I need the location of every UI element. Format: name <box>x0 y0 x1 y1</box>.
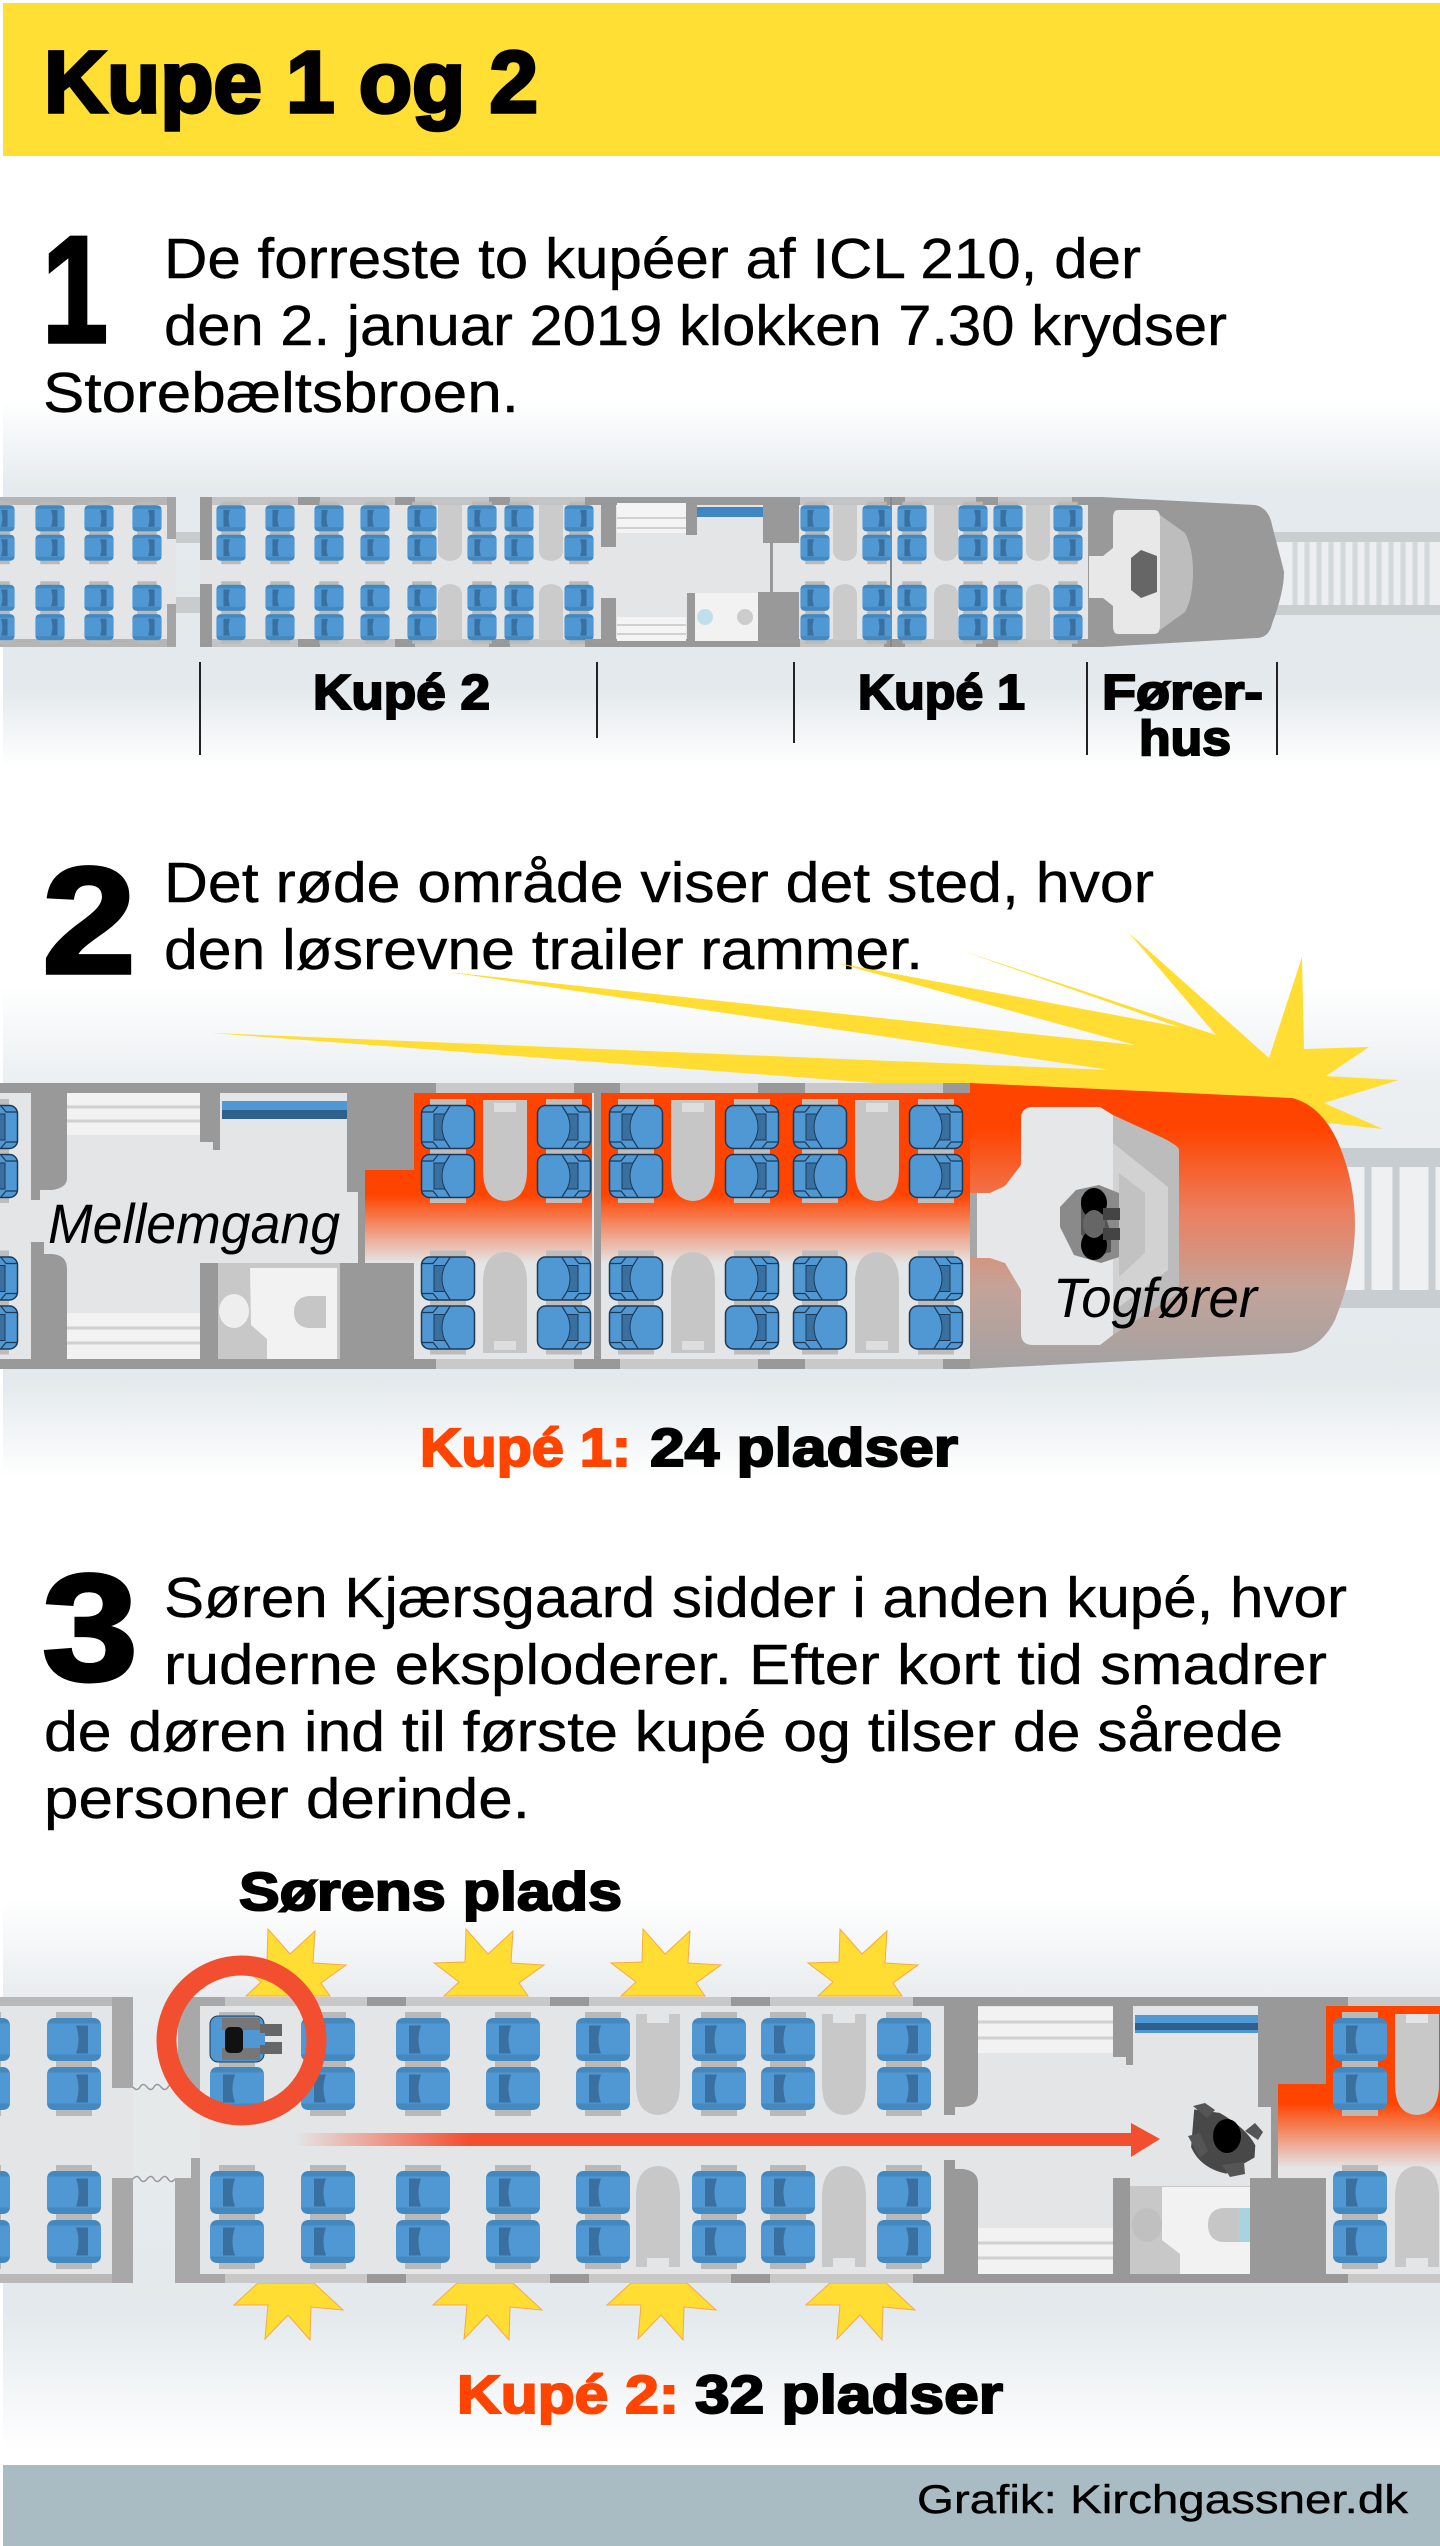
coupler <box>1330 1148 1440 1308</box>
red impact zone <box>365 1093 970 1265</box>
step 1 text: den 2. januar 2019 klokken 7.30 krydser <box>164 294 1227 358</box>
Kupé 1 capacity: Kupé 1: <box>420 1418 631 1478</box>
cab <box>970 1083 1355 1369</box>
label: Førerhus <box>1102 666 1263 766</box>
cab interior <box>970 1107 1179 1345</box>
step 1 text: De forreste to kupéer af ICL 210, der <box>164 227 1141 291</box>
Kupé 2 capacity: Kupé 2: <box>457 2365 679 2425</box>
arrow towards vestibule <box>296 2123 1160 2157</box>
step 2 text: Det røde område viser det sted, hvor <box>164 851 1154 915</box>
Kupé 2 capacity: 32 pladser <box>695 2365 1003 2425</box>
Kupé 2 seats <box>210 2012 1439 2269</box>
driver cab <box>1088 497 1284 647</box>
bench <box>1135 2015 1258 2033</box>
train overview diagram <box>0 497 1440 647</box>
carriage body <box>175 1997 1440 2283</box>
background band 3 <box>3 1900 1440 2450</box>
step 1 text <box>43 227 1227 425</box>
step 2 number: 2 <box>42 836 136 1006</box>
coupler at train front <box>1270 532 1440 615</box>
red impact zone <box>1278 2006 1440 2168</box>
step 3 number: 3 <box>42 1543 138 1713</box>
compartment divider <box>594 1083 601 1369</box>
rear carriage <box>0 1997 133 2283</box>
carriage body with Kupé 2 <box>200 497 1092 647</box>
wall blocks and toilet <box>1113 1997 1326 2283</box>
title banner <box>3 3 1440 156</box>
step 3 text: de døren ind til første kupé og tilser de sårede <box>44 1700 1283 1764</box>
background band 2 <box>3 985 1440 1478</box>
bench <box>222 1101 347 1119</box>
section markers and labels <box>200 662 1277 766</box>
step 3 text: personer derinde. <box>44 1767 530 1831</box>
label: Kupé 1: Kupé 1 <box>858 666 1025 720</box>
label: Togfører: Togfører <box>1053 1266 1259 1329</box>
rear carriage <box>0 497 200 647</box>
red ring around Sørens plads <box>166 1966 316 2116</box>
label: Mellemgang: Mellemgang <box>48 1192 340 1255</box>
seated passenger Søren <box>210 2016 282 2062</box>
gangway <box>133 2084 175 2182</box>
title: Kupe 1 og 2 <box>44 34 538 131</box>
driver figure <box>1060 1185 1120 1263</box>
Kupé 1 capacity <box>420 1418 958 1478</box>
step 1 number: 1 <box>42 205 108 375</box>
step 2 text: den løsrevne trailer rammer. <box>164 918 923 982</box>
background band 1 <box>3 400 1440 768</box>
step 2 text <box>164 851 1154 982</box>
step 1 text: Storebæltsbroen. <box>43 361 519 425</box>
Kupé 1 seats <box>800 497 1083 647</box>
window bursts <box>234 1929 918 2340</box>
vestibule <box>585 497 800 647</box>
toilet <box>200 1263 414 1369</box>
carriage floor and walls <box>0 1083 973 1369</box>
Kupé 1 seats and aisle blocks <box>422 1099 962 1354</box>
credit: Grafik: Kirchgassner.dk <box>917 2478 1409 2522</box>
step 3 text: Søren Kjærsgaard sidder i anden kupé, hvor <box>164 1566 1347 1630</box>
Kupé 1 capacity: 24 pladser <box>650 1418 958 1478</box>
left seats <box>0 1099 18 1354</box>
detail train with impact zone <box>0 1083 1440 1369</box>
label: Førerhus: hus <box>1139 712 1231 766</box>
label: Kupé 2: Kupé 2 <box>313 666 490 720</box>
label: Sørens plads: Sørens plads <box>239 1862 622 1922</box>
impact burst <box>211 933 1399 1129</box>
footer <box>3 2465 1440 2546</box>
detail train Kupé 2 <box>0 1997 1440 2283</box>
step 3 text <box>44 1566 1347 1831</box>
standing person <box>1187 2103 1263 2177</box>
Kupé 2 capacity <box>457 2365 1003 2425</box>
step 3 text: ruderne eksploderer. Efter kort tid smadrer <box>164 1633 1327 1697</box>
burst fragment behind cab <box>1345 1165 1381 1195</box>
label: Førerhus: Fører- <box>1102 666 1263 720</box>
